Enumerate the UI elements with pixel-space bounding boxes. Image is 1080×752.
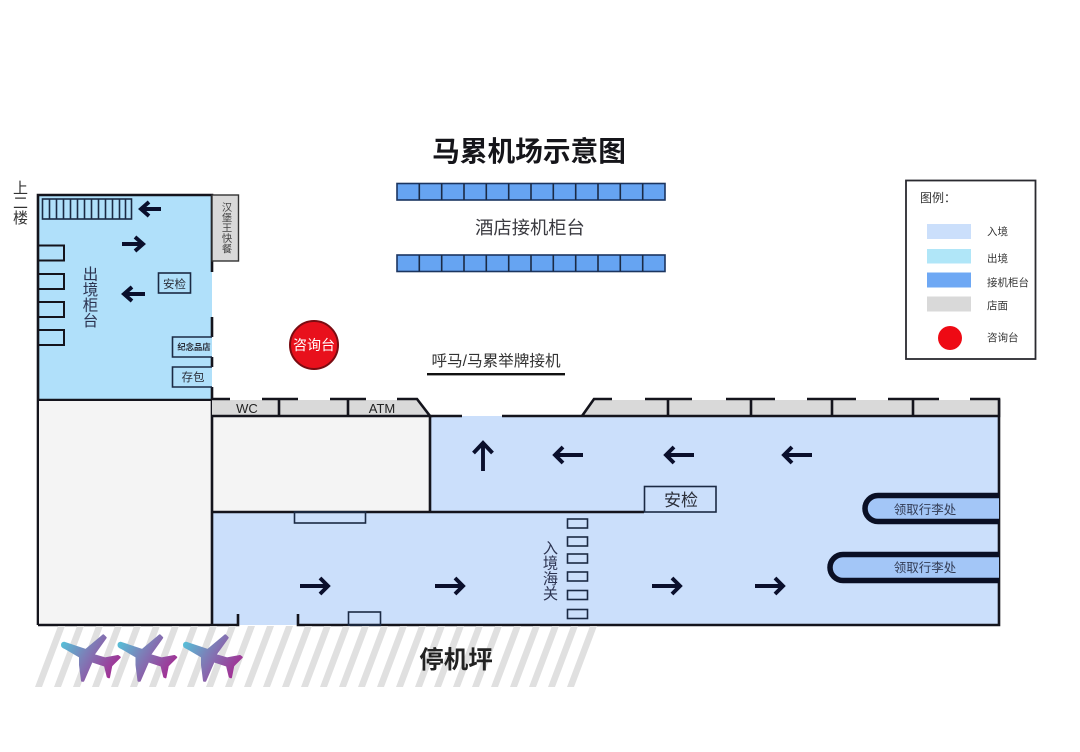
shop: burger king <box>212 195 238 261</box>
panel: arrivals hall <box>38 399 999 625</box>
baggage claim: top: 领取行李处 <box>894 502 957 517</box>
legend: departures <box>927 249 1008 265</box>
ATM label: ATM <box>369 401 395 416</box>
small room bottom <box>348 612 380 625</box>
hotel counters group <box>397 184 665 272</box>
arrow: left 1 <box>555 447 583 463</box>
legend title: 图例： <box>920 191 956 205</box>
baggage claim: bottom: 领取行李处 <box>894 560 957 575</box>
hotel counters label: 酒店接机柜台 <box>475 217 585 238</box>
info desk <box>290 321 338 369</box>
check-in counters <box>39 246 64 345</box>
shop: burger king: 汉堡王快餐 <box>220 202 232 254</box>
WC label: WC <box>236 401 258 416</box>
apron label: 停机坪 <box>419 646 493 674</box>
legend: departures: 出境 <box>987 252 1008 265</box>
arrow: left 3 <box>784 447 812 463</box>
upstairs label: 上二楼 <box>11 180 28 225</box>
legend: info desk <box>938 326 1018 350</box>
legend: counters <box>927 272 1029 289</box>
legend: arrivals: 入境 <box>987 225 1008 238</box>
arrivals security box <box>644 486 716 512</box>
shops strip: WC and ATM <box>212 399 430 416</box>
arrow: left to stairs <box>141 202 161 216</box>
arrow: right 2 <box>435 578 463 594</box>
panel: departures hall <box>38 195 212 625</box>
arrow: right 3 <box>652 578 680 594</box>
icon: airplane 2 <box>118 635 176 681</box>
legend: counters: 接机柜台 <box>987 276 1029 289</box>
arrow: right <box>122 237 143 251</box>
hotel counter row: bottom <box>397 255 665 272</box>
baggage claim: top <box>865 496 999 522</box>
luggage storage <box>172 367 212 387</box>
arrow: left <box>124 287 145 301</box>
baggage claim: bottom <box>830 554 999 580</box>
meet and greet label: 呼马/马累举牌接机 <box>431 352 561 370</box>
departures counter label: 出境柜台 <box>80 266 98 328</box>
tarmac stripes <box>35 626 597 687</box>
meet and greet label <box>427 352 565 375</box>
customs label: 入境海关 <box>540 540 558 601</box>
arrivals walls <box>38 399 999 625</box>
arrow: right 1 <box>300 578 328 594</box>
legend <box>906 180 1036 359</box>
souvenir shop: 纪念品店 <box>177 342 211 352</box>
legend: info desk: 咨询台 <box>987 331 1018 344</box>
info desk: 咨询台 <box>293 337 335 353</box>
customs booths <box>568 519 588 618</box>
icon: airplane 3 <box>184 635 242 681</box>
legend: shops: 店面 <box>987 299 1008 312</box>
arrow: left 2 <box>666 447 694 463</box>
departures security box <box>158 273 190 293</box>
departures walls <box>38 195 212 625</box>
legend: shops <box>927 296 1008 312</box>
souvenir shop <box>172 337 212 357</box>
luggage storage: 存包 <box>182 370 205 384</box>
departures security box: 安检 <box>163 277 186 291</box>
shops strip: right <box>582 399 999 416</box>
stairs to second floor <box>42 199 132 219</box>
icon: airplane 1 <box>62 635 120 681</box>
small room top <box>294 512 366 523</box>
arrow: up exit <box>474 443 492 471</box>
panel: middle closed area <box>213 417 430 512</box>
arrow: right 4 <box>755 578 783 594</box>
panel: lower left closed area <box>39 401 211 624</box>
legend: arrivals <box>927 224 1008 239</box>
hotel counter row: top <box>397 184 665 200</box>
arrivals security box: 安检 <box>664 491 698 510</box>
title: 马累机场示意图 <box>432 136 626 167</box>
